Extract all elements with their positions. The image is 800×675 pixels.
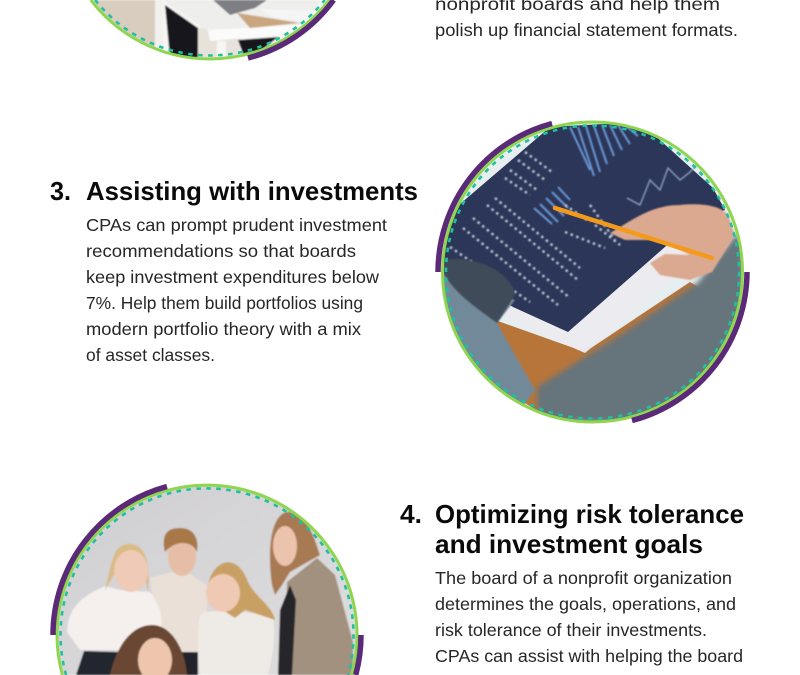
standing man (150, 572, 208, 652)
blue bars (534, 125, 638, 224)
heading: step 4: 4. (400, 499, 422, 529)
blurred foreground shoulder (537, 235, 744, 423)
arc: purple lower right (356, 635, 361, 675)
table rows (450, 152, 620, 305)
arc: purple lower right (632, 272, 747, 420)
text block: step 3 body (86, 215, 387, 365)
text block: step 3 body: recommendations so that boards (86, 241, 356, 261)
dark report sheet (442, 122, 725, 332)
hand (610, 204, 735, 280)
photo: office desk (92, 0, 326, 58)
wood desk (496, 282, 698, 411)
pencil (555, 208, 712, 258)
text block: step 4 body (435, 568, 743, 666)
arc: purple accent (248, 0, 334, 58)
right woman with blazer (270, 512, 320, 595)
text block: step 4 body: risk tolerance of their investments. (435, 620, 707, 640)
photo: team around a laptop (57, 485, 357, 675)
arc: purple upper left (53, 486, 167, 635)
panel: step 2 photo circle (85, 0, 335, 62)
ring: green outline (91, 0, 329, 59)
text block: step 3 body: of asset classes. (86, 345, 215, 365)
heading: step 4: and investment goals (435, 529, 703, 559)
sleeve and arm (442, 272, 535, 410)
seated woman (110, 625, 187, 675)
arc: purple upper left (438, 124, 552, 272)
heading: step 4: Optimizing risk tolerance (435, 499, 744, 529)
ring: green outline (57, 485, 357, 675)
text block: step 4 body: determines the goals, operations, and (435, 594, 736, 614)
heading: step 3: 3. (50, 176, 71, 206)
text block: step 2 closing lines (435, 0, 738, 40)
text block: step 3 body: CPAs can prompt prudent investment (86, 215, 387, 235)
chart line (626, 165, 697, 206)
heading: step 3: Assisting with investments (86, 176, 418, 206)
text block: step 4 body: CPAs can assist with helping the board (435, 646, 743, 666)
panel: step 4 photo circle (53, 485, 361, 675)
middle woman (198, 611, 274, 675)
ring: teal dashes (60, 488, 353, 675)
text block: step 2 closing lines: polish up financial statement formats. (435, 20, 738, 40)
text block: step 4 body: The board of a nonprofit organization (435, 568, 732, 588)
text block: step 3 body: 7%. Help them build portfolios using (86, 293, 363, 313)
text block: step 3 body: modern portfolio theory with a mix (86, 319, 361, 339)
ring: teal dashes (446, 126, 739, 418)
photo: pencil pointing at financial report (440, 122, 744, 425)
left woman (67, 586, 162, 650)
paper edge (570, 346, 592, 353)
text block: step 3 body: keep investment expenditures below (86, 267, 379, 287)
ring: teal dashes (95, 0, 325, 55)
panel: step 3 photo circle (438, 122, 747, 425)
ring: green outline (442, 122, 742, 422)
heading: step 4 (400, 499, 744, 559)
